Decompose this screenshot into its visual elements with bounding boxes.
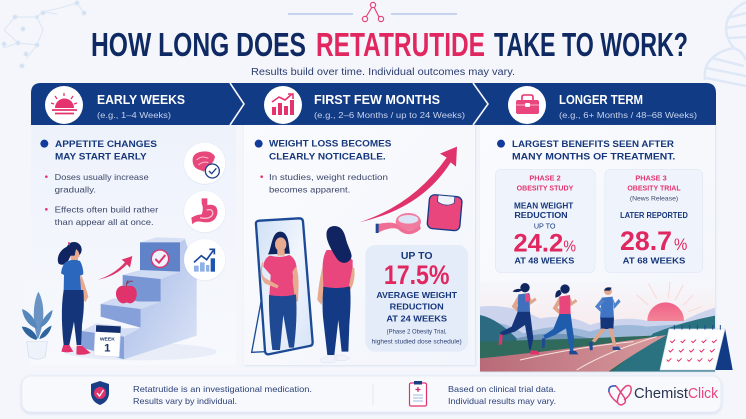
bullet text — [260, 172, 388, 194]
icon: apple — [116, 280, 137, 303]
phase: early weeks — [45, 86, 185, 124]
card: phase 3 obesity trial: (News Release) — [630, 195, 678, 202]
bullet list: Doses usually increase — [55, 172, 149, 182]
icon: shield — [91, 381, 109, 405]
title group — [91, 2, 688, 78]
card: phase 3 obesity trial: LATER REPORTED — [620, 211, 688, 220]
card: phase 2 obesity study: UP TO — [534, 222, 556, 231]
card: phase 2 obesity study: AT 48 WEEKS — [514, 255, 575, 265]
phase: early weeks: (e.g., 1–4 Weeks) — [97, 110, 171, 120]
arrow: rising — [98, 256, 132, 280]
phase: longer term: (e.g., 6+ Months / 48–68 Weeks) — [559, 110, 697, 120]
illustration: woman from behind — [317, 226, 355, 362]
decoration: molecule network — [2, 1, 86, 68]
footer bar — [22, 376, 721, 412]
card: phase 3 obesity trial: PHASE 3 — [635, 174, 667, 183]
icon: brain with check — [184, 143, 225, 184]
runner 1 — [499, 283, 540, 354]
heading: largest benefits: MANY MONTHS OF TREATMENT. — [512, 151, 675, 161]
heading: weight loss: CLEARLY NOTICEABLE. — [269, 151, 386, 161]
decorative title ornament — [288, 2, 457, 22]
bullet list — [45, 172, 158, 227]
safety note: Results vary by individual. — [133, 396, 237, 406]
icon: measuring tape — [376, 213, 421, 234]
stat card: 17.5 percent: AT 24 WEEKS — [386, 314, 447, 324]
data note: Individual results may vary. — [448, 396, 556, 406]
stat card: 17.5 percent: (Phase 2 Obesity Trial, — [387, 329, 447, 335]
card: phase 3 obesity trial: 28.7 — [620, 226, 672, 256]
card: phase 2 obesity study: MEAN WEIGHT — [514, 201, 573, 210]
phase: first few months: (e.g., 2–6 Months / up to 24 Weeks) — [314, 110, 465, 120]
card: phase 2 obesity study — [495, 169, 595, 273]
road — [480, 335, 667, 372]
safety note — [133, 384, 312, 406]
title — [91, 27, 688, 64]
title: HOW LONG DOES — [91, 27, 306, 64]
panel: early weeks — [22, 125, 236, 365]
heading: appetite changes — [40, 139, 157, 161]
card: phase 3 obesity trial: OBESITY TRIAL — [627, 184, 681, 193]
logo: ChemistClick: Chemist — [634, 386, 688, 402]
icon: rising bar chart — [184, 239, 225, 280]
reflection — [261, 232, 299, 350]
stat card: 17.5 percent: UP TO — [401, 251, 433, 262]
stat card: 17.5 percent — [365, 245, 468, 352]
logo: ChemistClick: Click — [688, 386, 719, 402]
card: phase 2 obesity study: % — [563, 238, 576, 255]
icon: week 1 calendar: 1 — [104, 343, 110, 355]
card: phase 2 obesity study: OBESITY STUDY — [517, 184, 573, 193]
card: phase 3 obesity trial: % — [674, 235, 688, 254]
icon: scale — [427, 194, 462, 231]
illustration: staircase — [63, 237, 217, 360]
icon: clipboard — [410, 381, 426, 406]
phase: longer term — [508, 86, 697, 124]
panel: longer term — [480, 125, 733, 372]
phase: first few months — [264, 86, 465, 124]
heading: largest benefits — [497, 139, 675, 161]
timeline header band — [31, 83, 716, 125]
card: phase 3 obesity trial: AT 68 WEEKS — [623, 255, 686, 265]
illustration: mirror — [252, 218, 313, 354]
illustration: running scene — [480, 282, 715, 372]
decoration: DNA helix — [705, 2, 746, 86]
card: phase 2 obesity study: REDUCTION — [514, 211, 568, 220]
runner 3 — [589, 287, 621, 350]
panel: first few months — [244, 125, 475, 365]
stat card: 17.5 percent: highest studied dose schedule) — [372, 339, 462, 345]
icon: stomach — [184, 191, 225, 232]
heading: largest benefits: LARGEST BENEFITS SEEN AFTER — [512, 139, 674, 149]
subtitle: Results build over time. Individual outcomes may vary. — [251, 67, 515, 78]
icon: potted plant — [22, 292, 53, 359]
safety note: Retatrutide is an investigational medication. — [133, 384, 312, 394]
title: RETATRUTIDE — [316, 27, 485, 64]
phase: longer term: LONGER TERM — [559, 93, 643, 107]
stat card: 17.5 percent: REDUCTION — [390, 302, 444, 312]
stat card: 17.5 percent: AVERAGE WEIGHT — [376, 290, 458, 300]
card: phase 2 obesity study: 24.2 — [513, 230, 563, 257]
bullet text: In studies, weight reduction — [269, 172, 388, 182]
bullet text: becomes apparent. — [269, 184, 350, 194]
runner 2 — [542, 284, 578, 354]
sun — [636, 282, 702, 321]
bullet list: gradually. — [55, 184, 96, 194]
heading: appetite changes: APPETITE CHANGES — [55, 139, 157, 149]
phase: first few months: FIRST FEW MONTHS — [314, 93, 440, 107]
icon: checklist calendar — [660, 325, 733, 370]
heading: appetite changes: MAY START EARLY — [55, 151, 147, 161]
card: phase 2 obesity study: PHASE 2 — [529, 174, 561, 183]
mountains — [480, 306, 715, 372]
arrow: weight trend — [359, 147, 457, 222]
card: phase 3 obesity trial — [605, 169, 703, 273]
bullet list: than appear all at once. — [55, 217, 154, 227]
bullet list: Effects often build rather — [55, 205, 158, 215]
data note — [448, 384, 556, 406]
heading: weight loss — [255, 139, 391, 161]
heading: weight loss: WEIGHT LOSS BECOMES — [269, 139, 391, 149]
icon: week 1 calendar — [94, 324, 121, 357]
phase: early weeks: EARLY WEEKS — [97, 93, 185, 107]
data note: Based on clinical trial data. — [448, 384, 556, 394]
illustration: woman — [58, 242, 91, 355]
icon: week 1 calendar: WEEK — [100, 337, 115, 343]
logo: ChemistClick — [609, 386, 719, 405]
stat card: 17.5 percent: 17.5% — [384, 260, 449, 290]
